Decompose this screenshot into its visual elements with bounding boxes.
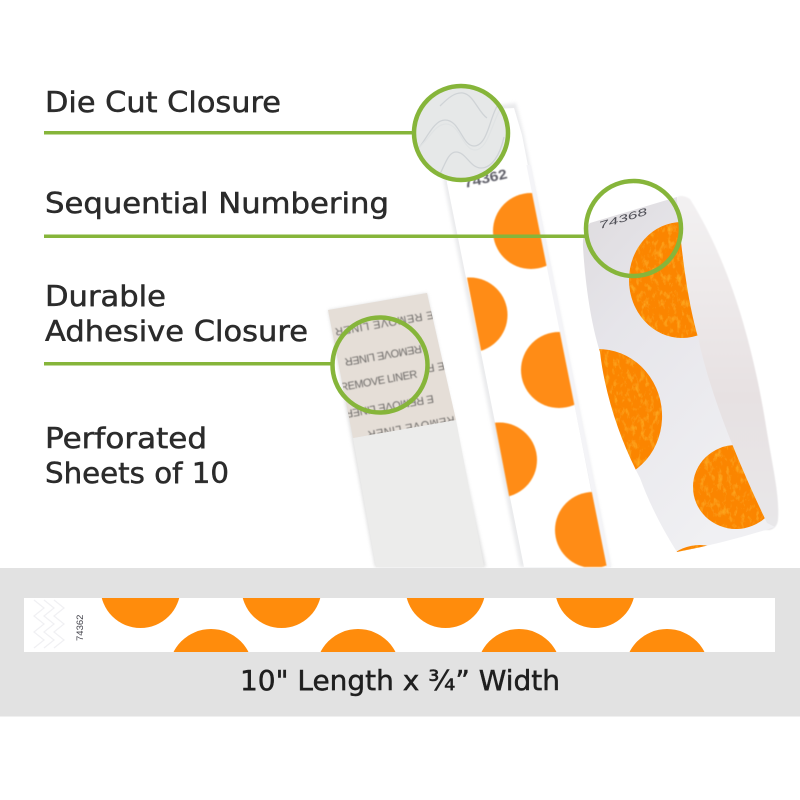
leader line: adhesive closure (44, 362, 331, 366)
size panel (0, 568, 800, 716)
callout circle: die cut detail (412, 86, 508, 180)
heading: die cut closure: Die Cut Closure (45, 86, 281, 119)
tan liner section (328, 293, 456, 438)
curled wristband (583, 196, 778, 552)
flat wristband: die cut and numbered strip (443, 103, 611, 568)
adhesive closure strip (328, 293, 486, 567)
callout circle: number detail (586, 181, 681, 276)
number on long band: 74362 (75, 615, 86, 641)
sequential number on strip: 74362 (462, 165, 509, 191)
peel-off white section (353, 420, 484, 567)
orange dots on curled band (599, 222, 765, 552)
heading: sequential numbering: Sequential Numbering (45, 187, 389, 220)
heading: durable adhesive closure: Durable (45, 280, 166, 313)
top row dots (102, 598, 634, 628)
remove liner print: REMOVE LINER (339, 369, 418, 394)
heading: perforated sheets of 10: Sheets of 10 (45, 457, 229, 490)
bottom row dots (174, 629, 704, 652)
remove liner print: E R (425, 359, 446, 374)
sequential number on curled band: 74368 (598, 207, 649, 232)
full length wristband (24, 598, 775, 652)
remove liner print (334, 308, 456, 440)
leader line: die cut closure (44, 131, 413, 134)
heading: perforated sheets of 10: Perforated (45, 422, 207, 455)
inner back face (677, 196, 778, 530)
remove liner print: E REMOVE LINER (334, 308, 435, 337)
remove liner print: E REMOVE LINER (344, 392, 435, 419)
size caption: 10" Length x ¾” Width (240, 664, 560, 697)
remove liner print: REMOVE LINER (344, 342, 423, 367)
front face (583, 197, 775, 552)
remove liner print: REMOVE LINER (367, 413, 456, 440)
orange dots on strip (466, 192, 608, 568)
heading: durable adhesive closure: Adhesive Closure (45, 315, 308, 348)
callout circle: adhesive detail (332, 318, 428, 412)
die cut chevrons (34, 600, 64, 648)
leader line: sequential numbering (44, 234, 585, 238)
